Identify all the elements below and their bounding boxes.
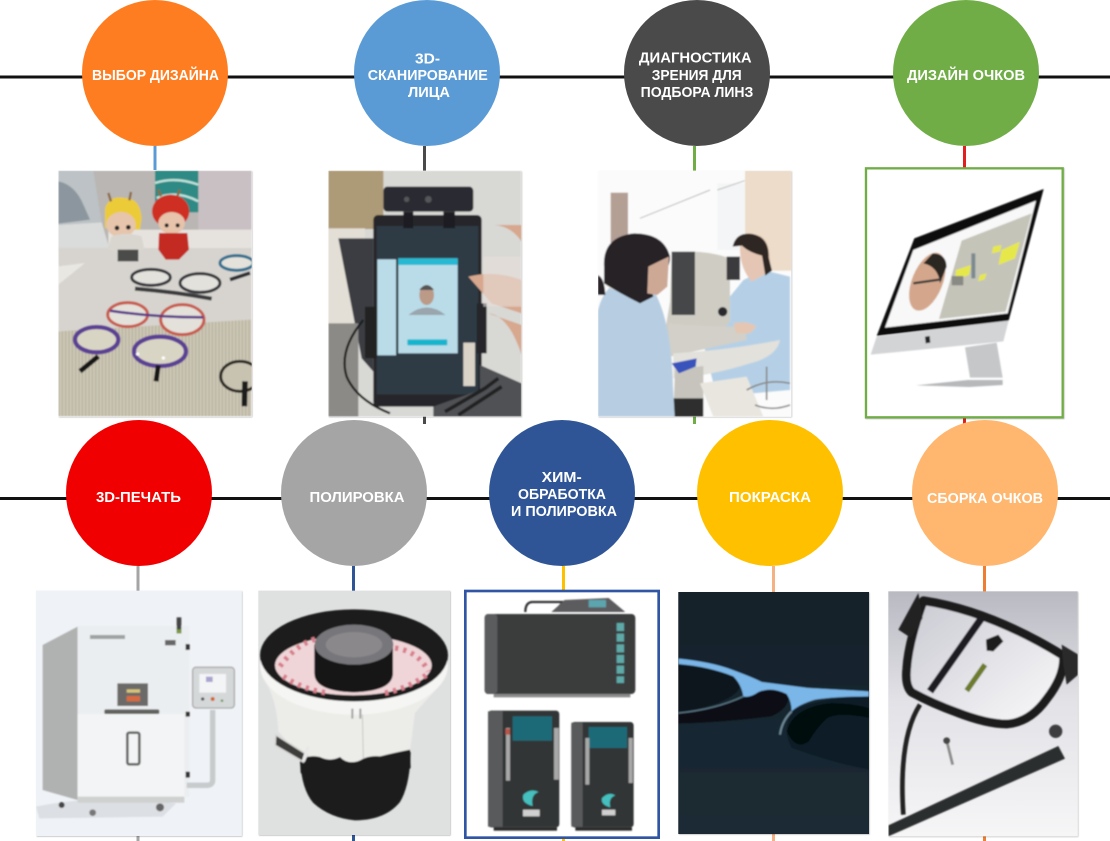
step: хим-обработка и полировка: ОБРАБОТКА bbox=[518, 487, 607, 503]
step: покраска: ПОКРАСКА bbox=[729, 490, 812, 506]
step: 3D-печать: 3D-ПЕЧАТЬ bbox=[96, 490, 181, 506]
photo: 3D printer bbox=[36, 591, 242, 836]
photo: painted frame on dark background bbox=[678, 592, 869, 834]
step: хим-обработка и полировка: И ПОЛИРОВКА bbox=[511, 504, 618, 520]
step: 3D-печать bbox=[66, 420, 212, 566]
connectors: top row bbox=[154, 146, 966, 424]
step: полировка: ПОЛИРОВКА bbox=[310, 490, 405, 506]
step: выбор дизайна bbox=[82, 0, 228, 146]
photo: chemical processing machines bbox=[465, 591, 659, 838]
step: диагностика зрения: ЗРЕНИЯ ДЛЯ bbox=[652, 68, 742, 84]
step: дизайн очков bbox=[893, 0, 1039, 146]
step: 3D-сканирование лица bbox=[354, 0, 500, 146]
timeline line: bottom row bbox=[0, 497, 1110, 500]
photo: vision diagnostics bbox=[598, 171, 792, 417]
photo: glasses and figurines bbox=[58, 171, 259, 417]
photo: 3D face scan on tablet bbox=[328, 171, 522, 417]
photo: eyeglasses assembly parts bbox=[888, 591, 1078, 836]
step: диагностика зрения: ДИАГНОСТИКА bbox=[639, 50, 752, 66]
step: дизайн очков: ДИЗАЙН ОЧКОВ bbox=[907, 66, 1025, 84]
step: покраска bbox=[697, 420, 843, 566]
step: диагностика зрения: ПОДБОРА ЛИНЗ bbox=[641, 85, 753, 101]
step: диагностика зрения bbox=[624, 0, 770, 146]
step: полировка bbox=[281, 420, 427, 566]
step: сборка очков bbox=[912, 420, 1058, 566]
step: хим-обработка и полировка: ХИМ- bbox=[542, 470, 582, 486]
step: 3D-сканирование лица: ЛИЦА bbox=[408, 85, 451, 101]
step: сборка очков: СБОРКА ОЧКОВ bbox=[927, 491, 1043, 507]
photo: glasses design on monitor bbox=[866, 168, 1063, 417]
step: 3D-сканирование лица: СКАНИРОВАНИЕ bbox=[368, 68, 488, 84]
step: хим-обработка и полировка bbox=[489, 420, 635, 566]
photo: vibratory polishing bowl bbox=[258, 591, 450, 835]
timeline line: top row bbox=[0, 76, 1110, 78]
connectors: bottom row bbox=[136, 566, 986, 841]
step: 3D-сканирование лица: 3D- bbox=[415, 52, 440, 68]
step: выбор дизайна: ВЫБОР ДИЗАЙНА bbox=[92, 66, 220, 84]
